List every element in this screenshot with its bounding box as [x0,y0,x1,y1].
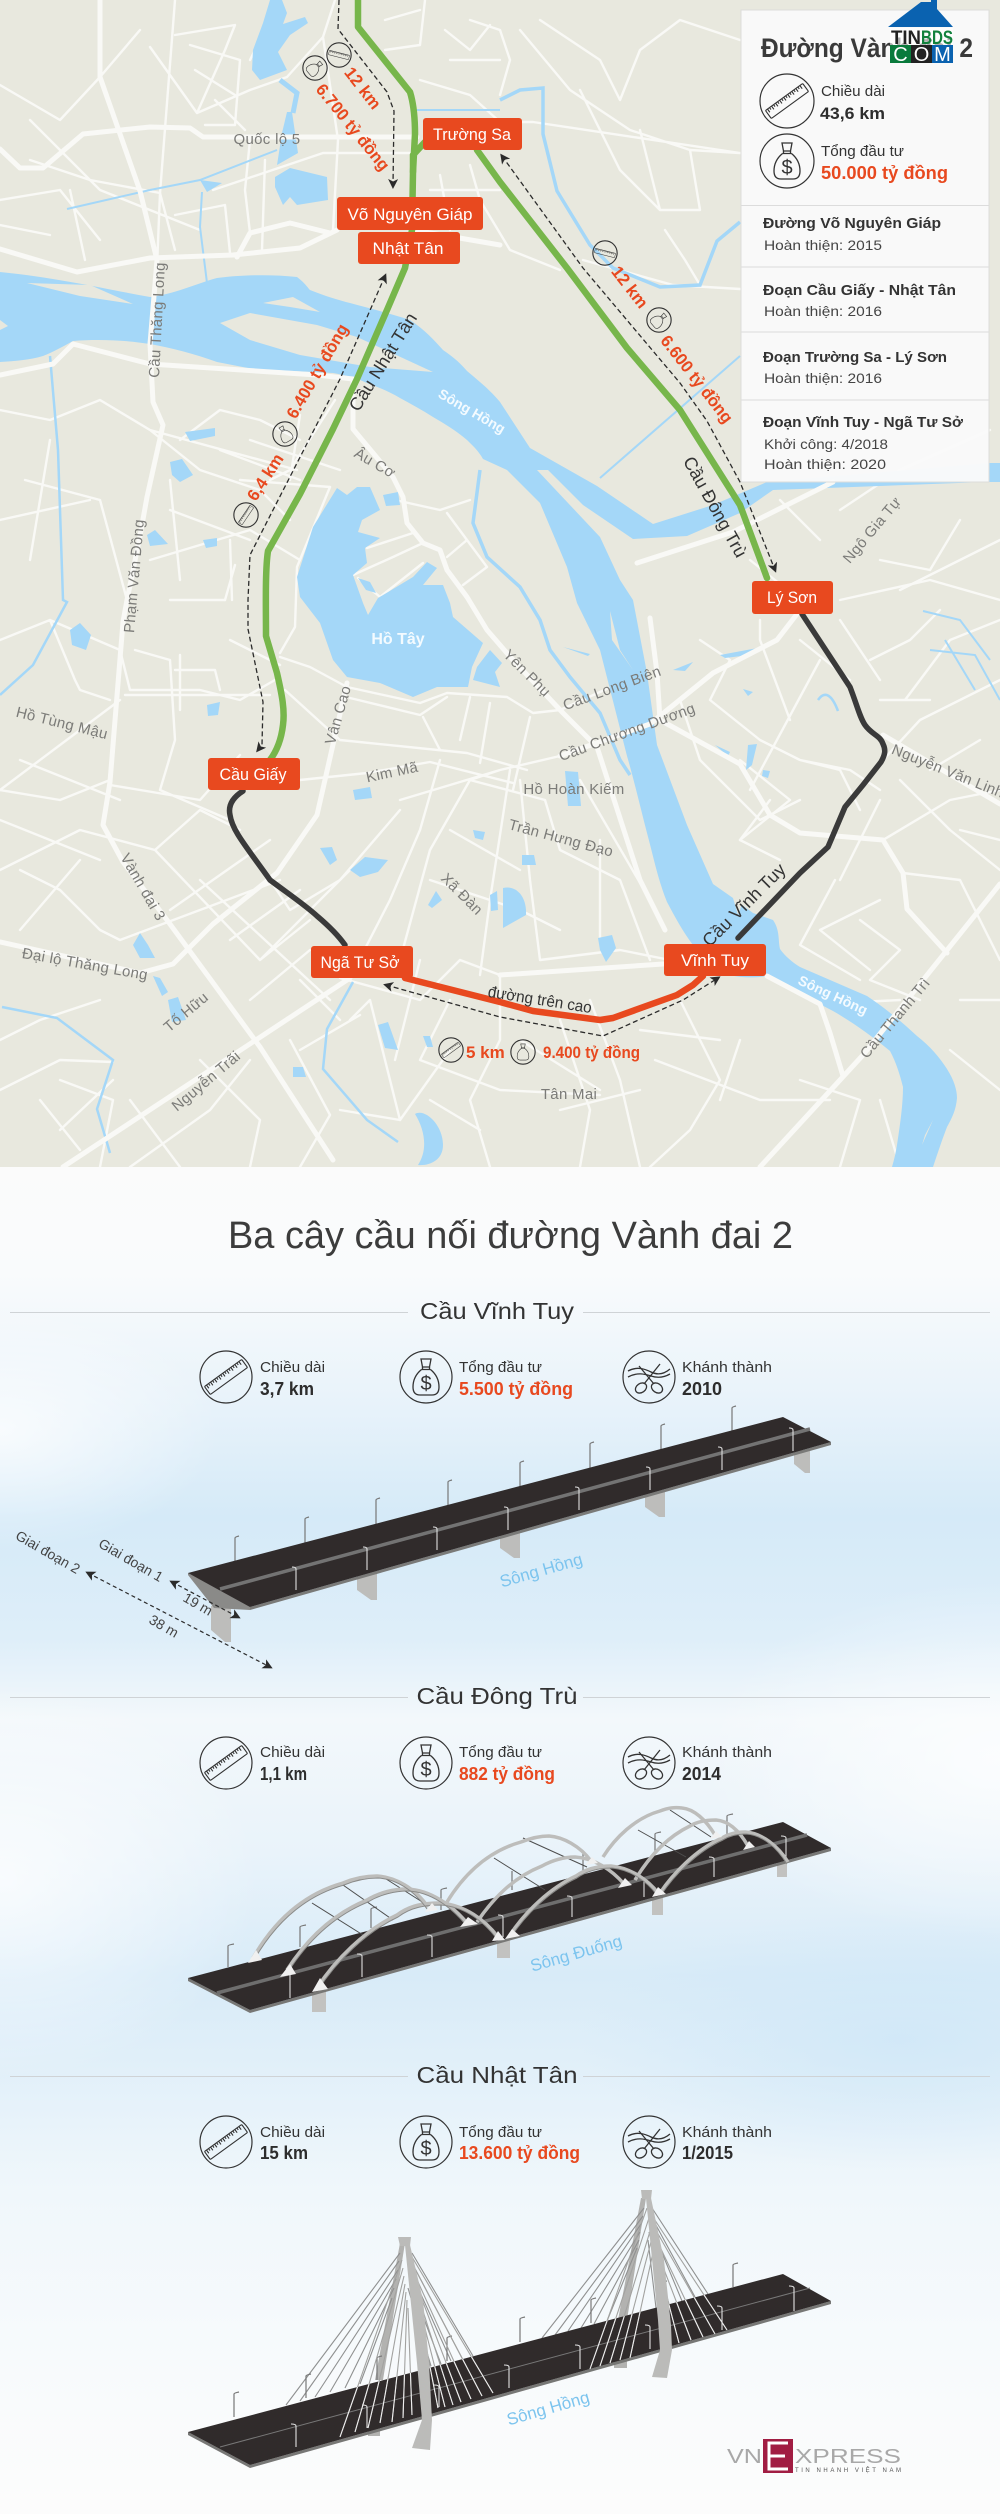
map labels: streets and bridges: Âu Cơ [351,445,398,482]
location tags: Nhật Tân [372,239,444,258]
stats: Cau Nhat Tan: $ [420,2138,432,2160]
info panel: ring road summary: Đường Võ Nguyên Giáp [763,215,941,232]
bridge illustration: Cau Dong Tru [188,1808,831,2013]
arch footings [248,1831,755,1992]
stats: Cau Vinh Tuy: 3,7 km [260,1379,314,1399]
section stats on the map: Cau Giay to Nhat Tan: 6.400 tỷ đồng [283,321,352,422]
logo: VnExpress [727,2439,901,2474]
section stats on the map: Cau Giay to Nhat Tan [234,321,352,527]
stats: Cau Nhat Tan: Tổng đầu tư [459,2124,542,2141]
map labels: streets and bridges: Hồ Hoàn Kiếm [523,781,625,798]
info panel: ring road summary: Hoàn thiện: 2015 [764,237,882,253]
front cables above the deck [340,2208,727,2437]
map labels: streets and bridges: Cầu Chương Dương [557,700,698,765]
info panel: ring road summary: Chiều dài [821,83,885,100]
map labels: streets and bridges: đường trên cao [487,984,593,1017]
logo: VnExpress: XPRESS [795,2446,901,2468]
panel: Cau Dong Tru [10,1683,990,2013]
stats: Cau Nhat Tan: Chiều dài [260,2124,325,2141]
rear pylon legs and small piers [368,2198,646,2436]
watermark: TinBDS logo: M [934,44,951,66]
main title: Ba cây cầu nối đường Vành đai 2 [228,1215,793,1257]
watermark: TinBDS logo [888,0,953,66]
location tags: Cầu Giấy [220,765,287,784]
left end wedge [188,1573,250,1610]
map labels: streets and bridges: Trần Hưng Đạo [507,816,615,861]
location tags: Trường Sa [433,125,512,144]
rear lamps [234,2263,738,2417]
info panel: ring road summary: Khởi công: 4/2018 [764,436,888,452]
panel: Cau Vinh Tuy [10,1298,990,1667]
info panel: ring road summary: Đoạn Vĩnh Tuy - Ngã Tư Sở [763,414,963,431]
stats: Cau Nhat Tan [200,2116,772,2168]
stats: Cau Dong Tru: 1,1 km [260,1764,307,1784]
stats: Cau Vinh Tuy [200,1351,772,1403]
front cables over the deck surface [340,2294,728,2438]
bridge illustration: Cau Vinh Tuy [188,1406,831,1642]
rear lamps [228,1814,733,1967]
info panel: ring road summary: Hoàn thiện: 2016 [764,370,882,386]
info panel: ring road summary: Đoạn Cầu Giấy - Nhật Tân [763,282,956,299]
info panel: ring road summary: Hoàn thiện: 2016 [764,303,882,319]
rear cables [286,2208,708,2405]
map labels: streets and bridges: Yên Phụ [500,646,554,700]
dimensions: construction phases: Giai đoạn 2 [13,1527,83,1577]
info panel: ring road summary: $ [781,157,793,179]
arches [253,1808,788,1988]
road deck [188,1848,831,2013]
road deck [188,2301,831,2468]
route: orange elevated section [405,976,703,1020]
section stats on the map: Nga Tu So to Vinh Tuy: 5 km [466,1043,505,1062]
heading: Cau Nhat Tan: Cầu Nhật Tân [416,2062,578,2088]
map water: rivers and lakes [0,0,1000,1167]
river label: Sông Hồng [505,2388,592,2429]
rear lamps [235,1406,736,1561]
map labels: streets and bridges: Đại lộ Thăng Long [21,945,149,984]
dashed distance arrows [248,0,775,1036]
stats: Cau Vinh Tuy: $ [420,1373,432,1395]
watermark: TinBDS logo: TIN [891,28,921,49]
info panel: ring road summary [741,10,989,482]
section stats on the map: Truong Sa to Ly Son: 12 km [607,263,652,312]
lower section background [0,1167,1000,2514]
stats: Cau Vinh Tuy: Tổng đầu tư [459,1359,542,1376]
info panel: ring road summary: 50.000 tỷ đồng [821,163,948,183]
section stats on the map: north Vo Nguyen Giap: 12 km [340,64,385,113]
map labels: streets and bridges: Ngô Gia Tự [840,494,905,567]
logo: VnExpress: TIN NHANH VIỆT NAM [795,2466,901,2474]
section stats on the map: Cau Giay to Nhat Tan: 6,4 km [243,450,288,504]
median [220,2288,810,2447]
stats: Cau Nhat Tan: 13.600 tỷ đồng [459,2143,580,2163]
section stats on the map: Nga Tu So to Vinh Tuy [439,1038,640,1064]
dimensions: construction phases: 19 m [181,1589,215,1619]
stats: Cau Vinh Tuy: Chiều dài [260,1359,325,1376]
median [217,1835,807,1993]
map labels: streets and bridges: Hồ Tây [371,631,425,648]
river label: Sông Hồng [498,1550,585,1591]
stats: Cau Dong Tru: 2014 [682,1764,721,1784]
median [220,1429,810,1589]
section stats on the map: Truong Sa to Ly Son [593,240,737,427]
watermark: TinBDS logo: C [893,44,908,66]
map labels: streets and bridges: Vân Cao [322,684,355,747]
map labels: streets and bridges [14,131,1000,1115]
map labels: streets and bridges: Cầu Long Biên [561,663,664,714]
route: black sections [230,614,885,945]
watermark: TinBDS logo: O [914,44,929,66]
info panel: ring road summary: 43,6 km [820,104,885,123]
panel: Cau Nhat Tan [10,2062,990,2468]
land islands in the rivers [0,283,933,1145]
map labels: streets and bridges: Sông Hồng [436,385,508,437]
map labels: streets and bridges: Tố Hữu [161,989,212,1036]
bridge illustration: Cau Nhat Tan [188,2190,831,2468]
heading: Cau Dong Tru: Cầu Đông Trù [416,1683,578,1709]
central lamps [292,1428,793,1590]
stats: Cau Vinh Tuy: 5.500 tỷ đồng [459,1379,573,1399]
map labels: streets and bridges: Cầu Thanh Trì [857,975,934,1062]
location tags: Võ Nguyên Giáp [348,205,472,224]
map labels: streets and bridges: Quốc lộ 5 [234,131,300,148]
location tags: Ngã Tư Sở [320,953,400,972]
map labels: streets and bridges: Cầu Vĩnh Tuy [698,859,790,951]
section stats on the map: Truong Sa to Ly Son: 6.600 tỷ đồng [656,332,737,427]
stats: Cau Nhat Tan: Khánh thành [682,2124,772,2141]
map labels: streets and bridges: Vành đai 3 [117,851,169,924]
northern lakes [252,0,308,80]
heading: Cau Vinh Tuy: Cầu Vĩnh Tuy [420,1298,575,1324]
stats: Cau Vinh Tuy: Khánh thành [682,1359,772,1376]
info panel: ring road summary: Hoàn thiện: 2020 [764,456,886,472]
central lamps [285,1836,786,1998]
road deck [250,1442,831,1610]
stats: Cau Dong Tru: Chiều dài [260,1744,325,1761]
map labels: streets and bridges: Cầu Thăng Long [146,262,169,378]
map labels: streets and bridges: Cầu Nhật Tân [345,309,421,415]
map labels: streets and bridges: Nguyễn Trãi [169,1048,244,1115]
info panel: ring road summary: Đoạn Trường Sa - Lý Sơn [763,349,947,366]
stats: Cau Dong Tru: $ [420,1759,432,1781]
map roads: minor [0,0,1000,1167]
info panel: ring road summary: Đường Vành đai 2 [761,33,973,63]
info panel: ring road summary: Tổng đầu tư [821,143,904,160]
map labels: streets and bridges: Cầu Đông Trù [679,453,751,561]
section stats on the map: Nga Tu So to Vinh Tuy: 9.400 tỷ đồng [543,1043,640,1062]
map streams [0,80,1000,1153]
map background [0,0,1000,1168]
West Lake [297,487,483,697]
stats: Cau Dong Tru [200,1737,772,1789]
river label: Sông Đuống [528,1931,624,1976]
section stats on the map: north Vo Nguyen Giap: 6.700 tỷ đồng [312,80,393,174]
stats: Cau Nhat Tan: 1/2015 [682,2143,733,2163]
location tags [208,118,833,978]
section stats on the map: north Vo Nguyen Giap [303,42,393,174]
Red River [0,272,1000,1167]
location tags: Vĩnh Tuy [681,951,749,970]
dimensions: construction phases: Giai đoạn 1 [96,1535,166,1585]
front pylons [398,2190,672,2450]
cross braces between arches [312,1810,711,1935]
piers [211,1450,810,1642]
route: green sections [266,0,767,760]
map labels: streets and bridges: Xã Đàn [437,870,486,919]
stats: Cau Vinh Tuy: 2010 [682,1379,722,1399]
arch undersides [254,1834,787,1990]
map labels: streets and bridges: Hồ Tùng Mậu [14,704,110,743]
stats: Cau Nhat Tan: 15 km [260,2143,308,2163]
stats: Cau Dong Tru: 882 tỷ đồng [459,1764,555,1784]
central lamps [291,2286,794,2447]
map labels: streets and bridges: Sông Hồng [796,972,870,1018]
map labels: streets and bridges: Phạm Văn Đồng [121,519,148,634]
piers [312,1860,787,2012]
map labels: streets and bridges: Kim Mã [365,759,420,786]
dimensions: construction phases [13,1527,270,1667]
stats: Cau Dong Tru: Khánh thành [682,1744,772,1761]
map labels: streets and bridges: Tân Mai [541,1086,597,1103]
dimensions: construction phases: 38 m [147,1611,181,1641]
location tags: Lý Sơn [767,588,817,607]
stats: Cau Dong Tru: Tổng đầu tư [459,1744,542,1761]
logo: VnExpress: VN [727,2446,762,2468]
Truc Bach Lake [473,650,502,687]
map roads: major [0,0,1000,1167]
watermark: TinBDS logo: BDS [921,28,953,49]
